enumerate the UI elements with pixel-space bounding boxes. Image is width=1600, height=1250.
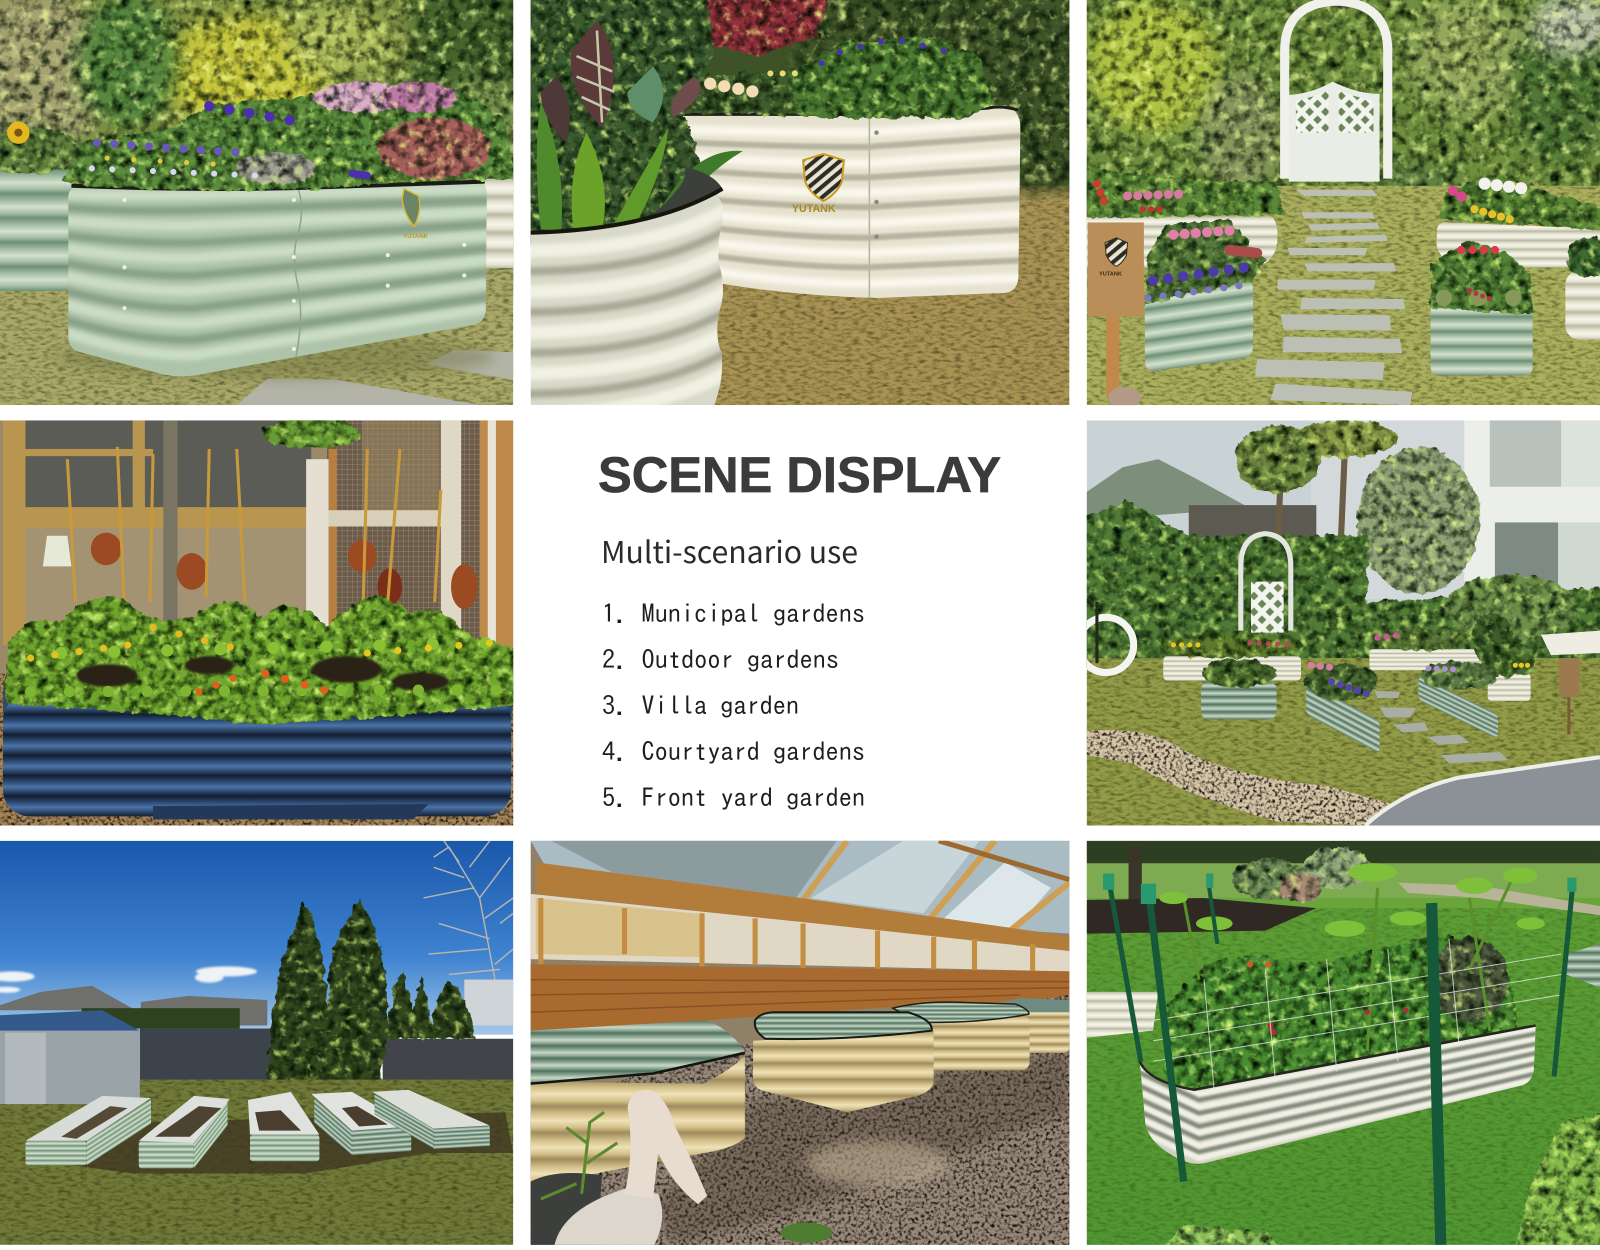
blue corrugated bed xyxy=(3,634,512,819)
stake caps xyxy=(1103,873,1577,904)
small arch with gate xyxy=(1241,534,1291,633)
item 4: 4. Courtyard gardens xyxy=(602,739,865,765)
potted plant xyxy=(531,1112,617,1245)
upper lawn and path xyxy=(1087,862,1600,915)
logo on sage bed xyxy=(402,189,429,240)
left sage bed xyxy=(1145,279,1253,372)
river stones xyxy=(1087,730,1400,826)
yutank shield logo xyxy=(792,154,844,215)
road xyxy=(1365,757,1600,826)
foreground plants xyxy=(1143,1112,1600,1250)
chickens xyxy=(91,533,478,609)
left cream bed xyxy=(1087,216,1278,267)
arch and gate xyxy=(1285,1,1388,182)
far right bed xyxy=(1565,237,1600,340)
right sage bed xyxy=(1431,302,1533,376)
red blooms xyxy=(1250,964,1406,1039)
fence xyxy=(140,1029,513,1090)
dry grass xyxy=(714,186,1069,405)
far bed four xyxy=(978,998,1069,1053)
bed plant mass xyxy=(1163,934,1520,1092)
stepping stones xyxy=(237,350,513,405)
photo: greenhouse with tan beds xyxy=(531,841,1069,1247)
photo: garden path with white arch gate xyxy=(1056,0,1600,409)
leaves dotted over soil xyxy=(31,643,500,692)
centre post xyxy=(163,420,178,645)
item 1: 1. Municipal gardens xyxy=(602,601,865,627)
house xyxy=(1311,420,1600,604)
sky xyxy=(1087,420,1600,665)
photo: sage green raised bed with flowers xyxy=(0,0,546,405)
lawn xyxy=(1087,186,1600,405)
soil band xyxy=(20,1112,513,1173)
cypress trees xyxy=(267,898,474,1084)
sage bed behind xyxy=(0,169,73,291)
right sage bed flowers xyxy=(1431,240,1533,314)
left flowers xyxy=(1077,168,1286,218)
marigold blooms xyxy=(31,628,490,694)
glass roof xyxy=(531,841,1069,934)
long cream beds xyxy=(1163,649,1531,701)
bed two xyxy=(139,1096,230,1168)
photo: silver bed with stakes on green lawn xyxy=(1087,841,1600,1250)
sage angled bed two xyxy=(1418,676,1498,739)
right flowers xyxy=(1439,176,1600,231)
bed two xyxy=(753,1012,934,1112)
tomato plant mass xyxy=(5,597,520,724)
hedge xyxy=(82,1008,240,1029)
tall sunflower sprouts xyxy=(1159,863,1545,1051)
sage bed blooms xyxy=(1311,665,1454,694)
trellis netting xyxy=(1153,939,1561,1092)
cream corrugated bed xyxy=(682,105,1020,298)
flower mound xyxy=(0,82,513,190)
far bed right xyxy=(1566,944,1600,988)
window posts xyxy=(541,898,1033,1031)
right blooms xyxy=(1453,184,1525,219)
garden sign xyxy=(1559,658,1580,735)
blooms xyxy=(1173,635,1529,665)
white cloth on pallet xyxy=(1541,631,1600,655)
left blooms xyxy=(1097,184,1184,209)
neighbour roofs xyxy=(0,986,267,1026)
grass xyxy=(0,1080,513,1245)
white house right xyxy=(464,980,513,1026)
bed four xyxy=(311,1092,411,1155)
bamboo stakes xyxy=(67,447,441,612)
green stakes xyxy=(1110,888,1572,1245)
roof beams xyxy=(801,841,1069,931)
list of scenarios xyxy=(602,601,865,811)
wall planks xyxy=(531,980,1069,1012)
lawn xyxy=(1087,658,1600,826)
background foliage xyxy=(0,0,546,296)
distant hill xyxy=(1087,459,1250,520)
olive tree xyxy=(1357,447,1480,594)
left sage blooms xyxy=(1148,231,1257,298)
far bed three xyxy=(893,1002,1030,1070)
ground xyxy=(0,673,513,826)
stepping stones xyxy=(1255,190,1412,405)
item 2: 2. Outdoor gardens xyxy=(602,647,839,673)
purple flowers xyxy=(92,106,367,176)
rivets xyxy=(122,198,466,351)
tree trunk xyxy=(1129,847,1142,903)
right sage blooms xyxy=(1444,250,1520,301)
item 5: 5. Front yard garden xyxy=(602,785,865,811)
photo: villa garden with planters xyxy=(1077,420,1600,826)
front planter xyxy=(530,166,724,405)
bed one xyxy=(531,1020,745,1186)
bed three xyxy=(248,1092,319,1161)
sunlight on gravel xyxy=(806,1141,949,1186)
ornamental grass xyxy=(1232,847,1372,902)
clouds xyxy=(0,966,257,993)
wood wall xyxy=(531,964,1069,1033)
heading: SCENE DISPLAY xyxy=(598,447,1001,503)
gravel shadow xyxy=(653,1051,1069,1245)
sloped wooden rafter xyxy=(536,862,1069,951)
item 3: 3. Villa garden xyxy=(602,693,799,719)
mulch bed xyxy=(1087,898,1316,934)
coop screen upper xyxy=(20,420,311,517)
fence xyxy=(1189,505,1316,541)
bed five xyxy=(372,1090,490,1149)
gerbera flowers xyxy=(710,73,801,92)
palms xyxy=(1235,420,1398,566)
sage bed shadow xyxy=(56,335,495,380)
soil gaps xyxy=(77,656,449,691)
photo: blue raised bed by chicken coop xyxy=(0,418,520,826)
purple blooms xyxy=(821,39,954,63)
wooden sign xyxy=(1088,222,1144,396)
cream bed flowers xyxy=(1160,612,1535,677)
photo: five raised beds in backyard xyxy=(0,841,513,1245)
main sage corrugated bed xyxy=(68,182,487,376)
rim xyxy=(71,182,485,189)
stepping stones xyxy=(1374,691,1508,763)
sunflower xyxy=(7,121,30,144)
dark hedge xyxy=(796,0,1102,189)
calathea and green leaves xyxy=(537,20,743,230)
coop right wire mesh xyxy=(306,420,513,650)
sky xyxy=(0,841,513,1035)
gravel floor xyxy=(531,995,1069,1245)
right cream bed xyxy=(1437,222,1600,267)
bed one xyxy=(26,1096,151,1165)
subheading: Multi-scenario use xyxy=(601,528,858,572)
storage shed xyxy=(0,1010,140,1104)
right plant mound xyxy=(663,36,992,118)
logo on sage bed: YUTANK xyxy=(403,233,429,240)
rock xyxy=(1108,387,1141,409)
sage round bed xyxy=(1201,682,1277,719)
front planter foliage xyxy=(520,0,714,245)
main silver bed xyxy=(1133,1020,1541,1173)
far silver bed left xyxy=(1087,992,1158,1038)
photo: cream bed on dry grass xyxy=(520,0,1102,414)
center text block xyxy=(598,447,1001,811)
left sage bed flowers xyxy=(1145,219,1265,304)
lawn xyxy=(0,269,513,405)
bare tree xyxy=(423,841,513,980)
lawn texture xyxy=(1087,908,1600,1245)
yutank shield logo: YUTANK xyxy=(792,203,836,215)
white ring sculpture xyxy=(1079,602,1134,672)
cream bed behind xyxy=(483,178,514,268)
wooden sign: YUTANK xyxy=(1099,272,1122,278)
rivets xyxy=(874,130,879,239)
wooden framing xyxy=(3,420,306,645)
plant backdrop xyxy=(531,0,1069,194)
window band xyxy=(531,894,1069,971)
window left tint xyxy=(536,898,704,957)
pelican statue xyxy=(554,1090,707,1247)
rim line xyxy=(6,696,508,702)
overhanging plant xyxy=(262,418,360,449)
rim xyxy=(673,107,1018,114)
sage angled bed one xyxy=(1306,682,1380,753)
background greenery xyxy=(1056,0,1600,222)
sage bed foliage xyxy=(1202,659,1498,700)
plant foreground xyxy=(781,1222,832,1243)
garden greenery xyxy=(1077,500,1600,668)
soil xyxy=(14,641,505,700)
coop interior lower xyxy=(20,526,311,648)
croton leaves xyxy=(706,0,828,58)
tree band xyxy=(1087,841,1600,863)
feeder xyxy=(43,536,71,566)
